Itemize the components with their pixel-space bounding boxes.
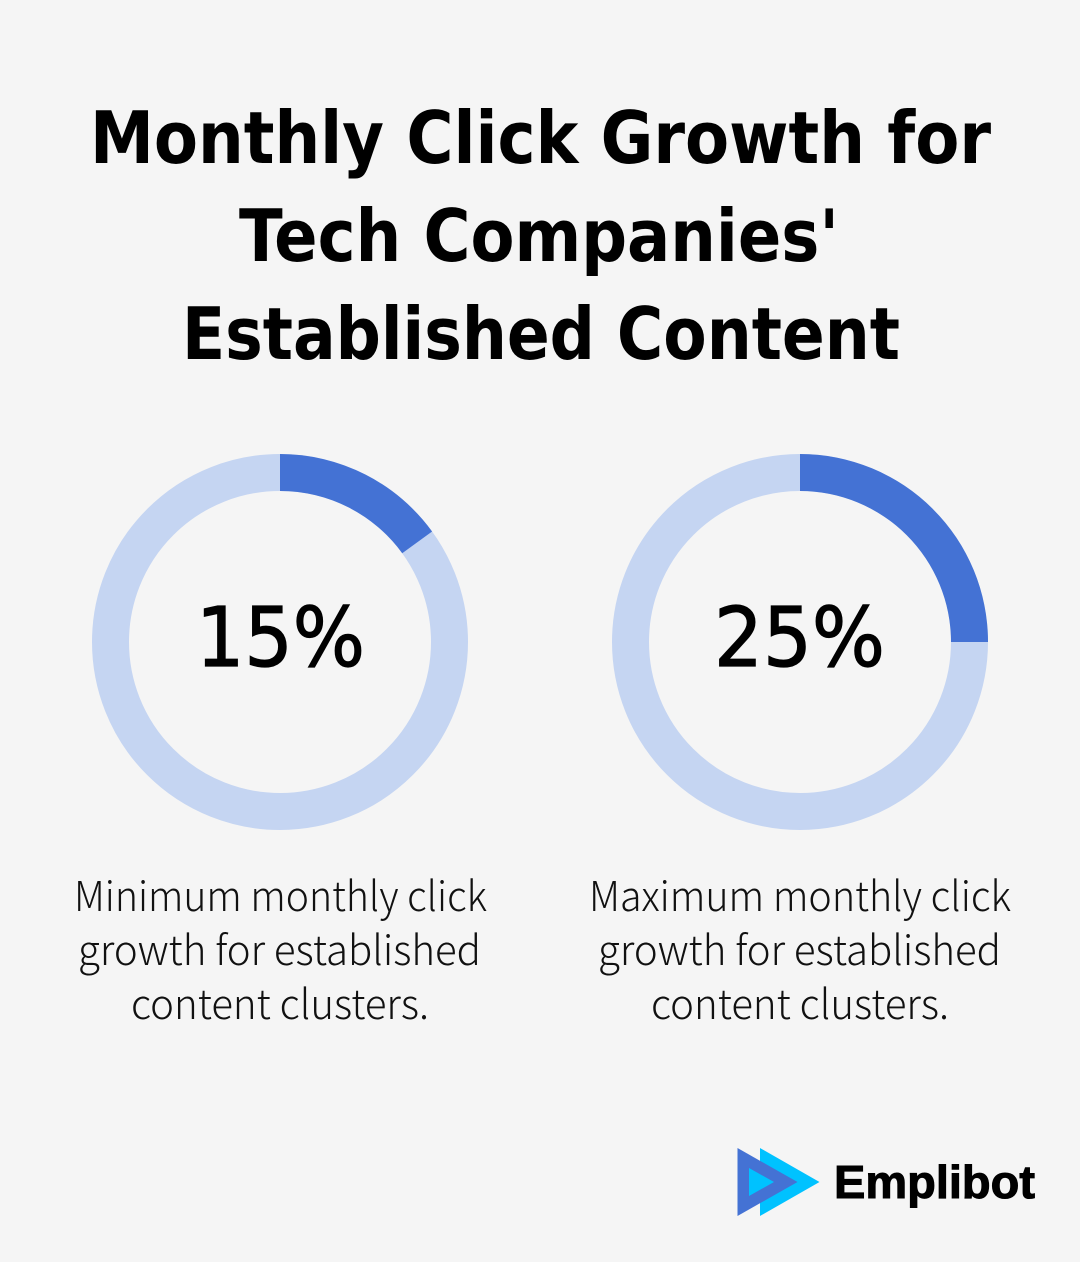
description: maximum: content clusters. <box>651 971 949 1031</box>
wordmark: Emplibot <box>834 1156 1035 1208</box>
value: 15%: 15% <box>196 591 365 686</box>
icon: play triangles <box>738 1148 820 1216</box>
title: Established Content <box>182 292 900 376</box>
donut chart: 15% <box>110 454 450 812</box>
donut chart: 25% <box>630 454 988 812</box>
description: maximum: growth for established <box>598 917 1001 977</box>
description: maximum <box>589 863 1011 1031</box>
title: Tech Companies' <box>239 194 839 278</box>
description: minimum: growth for established <box>78 917 481 977</box>
description: maximum: Maximum monthly click <box>589 863 1011 923</box>
description: minimum: content clusters. <box>131 971 429 1031</box>
panel: minimum growth <box>74 454 487 1031</box>
description: minimum: Minimum monthly click <box>74 863 487 923</box>
title: Monthly Click Growth for <box>90 96 991 180</box>
value: 25%: 25% <box>714 591 885 686</box>
title <box>90 96 991 376</box>
panel: maximum growth <box>589 454 1011 1031</box>
logo: Emplibot <box>738 1148 1035 1216</box>
description: minimum <box>74 863 487 1031</box>
